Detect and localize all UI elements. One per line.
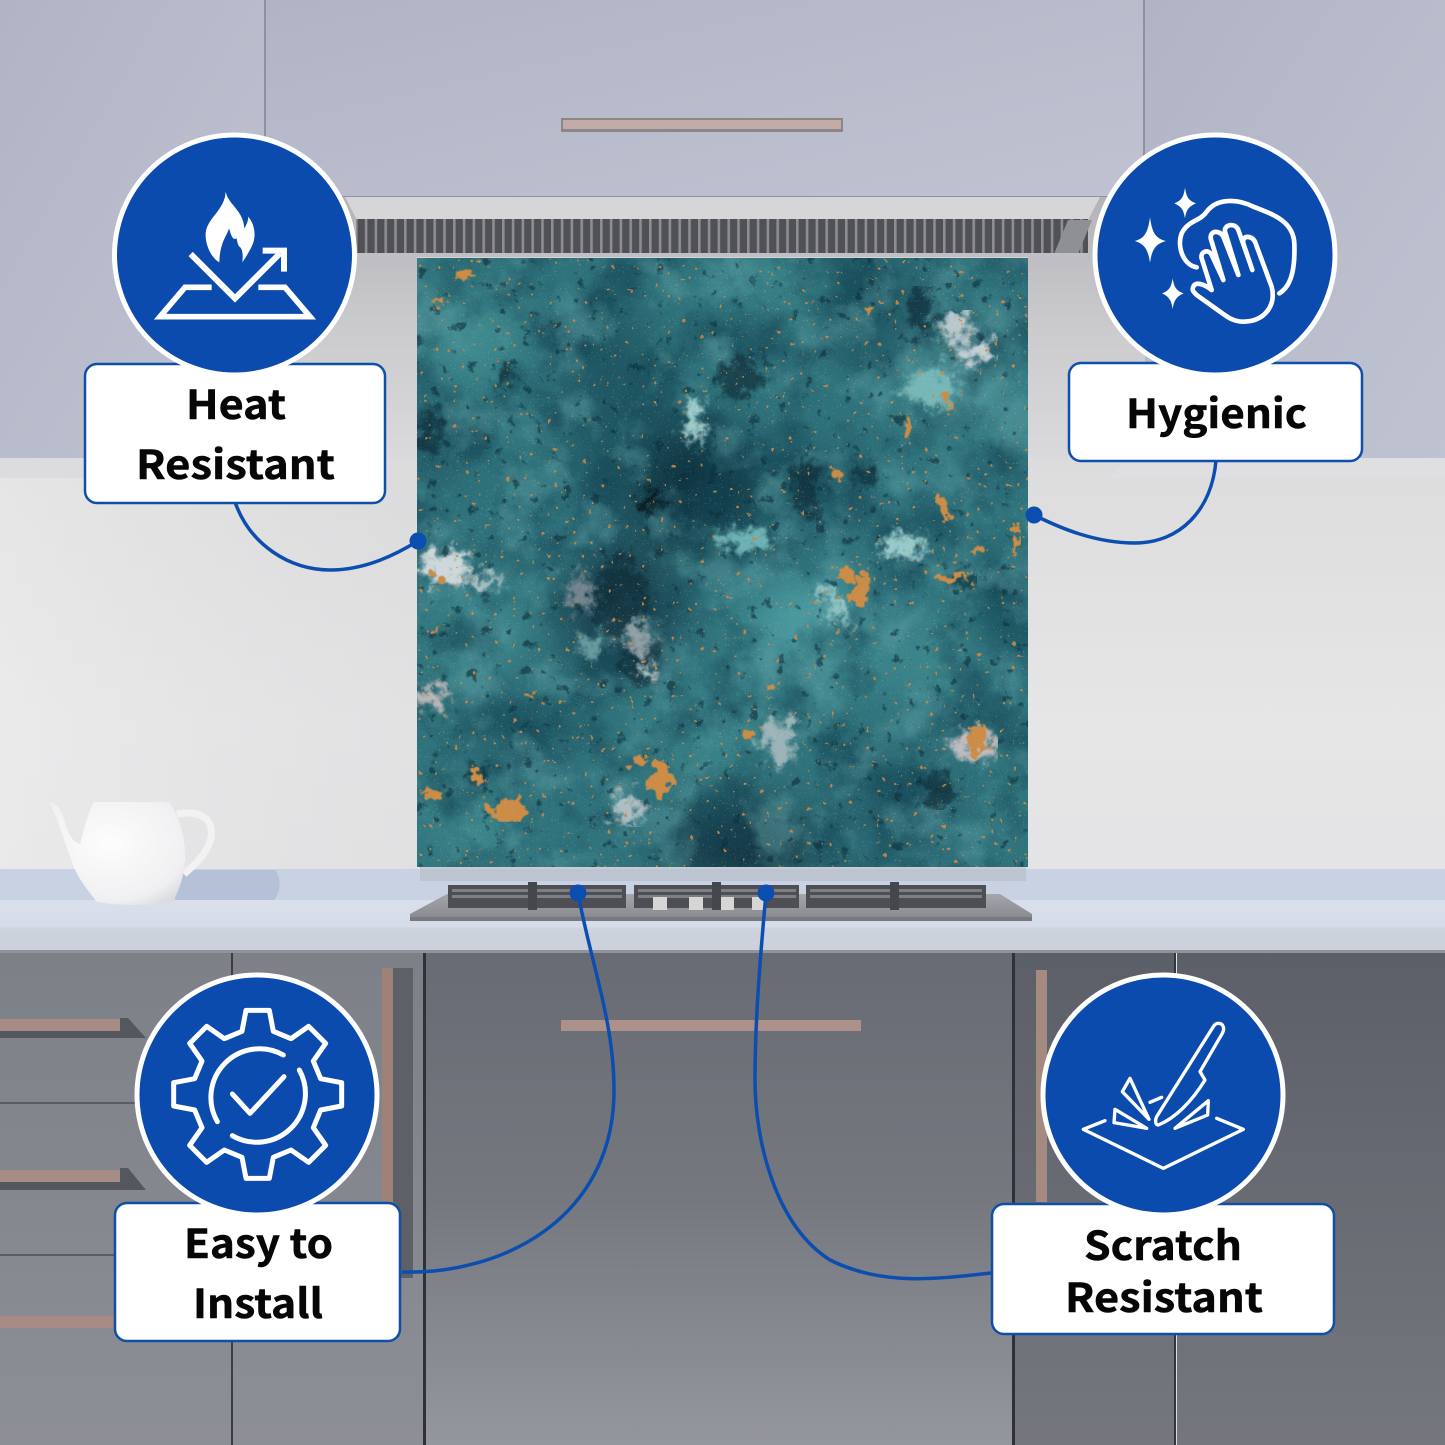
label: hygienic: Hygienic	[1126, 382, 1307, 440]
icon: gear with check mark	[174, 1010, 342, 1178]
label box: heat resistant	[85, 364, 385, 503]
copper splatter	[420, 268, 1021, 822]
label: scratch resistant: Resistant	[1065, 1266, 1263, 1324]
label: heat resistant	[136, 373, 335, 491]
icon circle: heat	[114, 135, 354, 375]
pale mineral patches	[413, 310, 998, 827]
dark clusters	[417, 286, 977, 810]
white teapot	[48, 802, 211, 905]
connector: easy to install	[402, 884, 614, 1272]
callout: hygienic	[1069, 135, 1362, 461]
lower cabinets	[0, 953, 1445, 1445]
callout: heat resistant	[85, 135, 385, 503]
connector: heat resistant	[235, 502, 426, 570]
icon: flame deflected off surface	[160, 192, 310, 317]
callout: easy to install	[115, 975, 400, 1341]
dark ink blots	[417, 258, 1028, 867]
fine white speckle	[417, 258, 1028, 867]
label: easy to install: Easy to	[184, 1212, 333, 1270]
connector: scratch resistant	[755, 884, 991, 1279]
cooker hood	[345, 197, 1100, 257]
label: easy to install: Install	[193, 1272, 323, 1330]
icon circle: hygienic	[1095, 135, 1335, 375]
label box: scratch resistant	[992, 1204, 1334, 1334]
cabinet handles	[0, 968, 1047, 1328]
mottled marble clouds	[417, 258, 1028, 867]
connector: hygienic	[1026, 460, 1216, 543]
label: heat resistant: Heat	[186, 373, 286, 431]
icon circle: scratch resistant	[1043, 975, 1283, 1215]
label: scratch resistant: Scratch	[1084, 1214, 1242, 1272]
large tonal blotches	[400, 250, 1040, 885]
icon: knife on surface with shards	[1083, 1023, 1243, 1168]
label: scratch resistant	[1065, 1214, 1263, 1324]
upper cabinet handle	[561, 118, 843, 132]
icon: hand wiping with sparkles	[1135, 188, 1294, 322]
label box: easy to install	[115, 1203, 400, 1341]
label: easy to install	[184, 1212, 333, 1330]
label box: hygienic	[1069, 363, 1362, 461]
upper cabinets	[0, 0, 1445, 478]
icon circle: easy to install	[137, 975, 377, 1215]
label: heat resistant: Resistant	[136, 433, 335, 491]
panel: teal marble splashback	[400, 250, 1040, 885]
countertop	[0, 867, 1445, 953]
teapot shadow	[175, 870, 280, 900]
small copper flecks	[417, 258, 1028, 867]
callout: scratch resistant	[992, 975, 1334, 1334]
gas cooktop	[410, 882, 1032, 921]
